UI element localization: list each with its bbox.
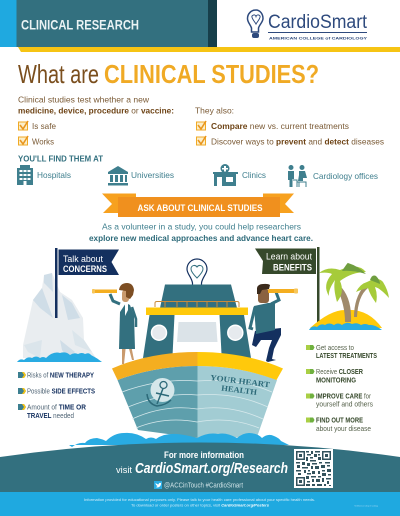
checklist: criteria: Is safe [32,121,56,131]
ribbon: ask about clinical studies [102,194,294,217]
island with palm trees [309,263,389,330]
icon: patient and doctor [288,165,307,187]
locations row: Hospitals [37,170,71,180]
locations heading: YOU'LL FIND THEM AT [18,154,104,164]
list: concerns [18,370,95,420]
volunteer statement: explore new medical approaches and advance heart care. [89,233,313,243]
checklist: they also: Discover ways to prevent and detect diseases [211,136,384,146]
intro text [18,94,174,116]
title: CLINICAL STUDIES? [104,59,319,89]
list: benefits: IMPROVE CARE for [316,392,371,400]
footer disclaimer: ©2016 American College of Cardiology [354,504,378,508]
footer band [0,442,400,493]
footer band: visit [116,465,132,476]
icon: hospital [17,165,33,185]
ship [112,284,283,438]
list: concerns: Amount of TIME OR [27,402,87,412]
anchor badge [147,378,174,406]
locations row: Cardiology offices [313,171,378,181]
flag: talk about concerns: CONCERNS [63,264,107,274]
flag: learn about benefits: BENEFITS [273,262,312,272]
locations row: Clinics [242,170,266,180]
man with spyglass [250,284,298,362]
locations row [17,164,378,187]
light bulb [187,259,207,290]
woman with spyglass [92,283,136,364]
footer disclaimer [0,492,400,516]
iceberg [23,273,96,358]
list: benefits: yourself and others [316,400,373,408]
list: benefits: FIND OUT MORE [316,416,363,424]
flag: learn about benefits [255,247,320,322]
waves under ship [69,433,289,447]
checklist: criteria [18,121,56,146]
CardioSmart logo: AMERICAN COLLEGE of CARDIOLOGY [269,36,367,40]
title [18,59,319,89]
QR code [294,449,333,488]
hull text: YOUR HEART [210,373,271,389]
list: benefits [306,343,377,433]
cabin [143,284,251,358]
checklist: criteria: Works [32,136,54,146]
locations row: Universities [131,170,174,180]
checklist: they also: Compare new vs. current treatments [211,121,349,131]
flag: talk about concerns: Talk about [63,254,103,264]
list: concerns: TRAVEL needed [27,411,74,420]
footer band: @ACCinTouch #CardioSmart [164,482,243,490]
icon: university [108,166,128,186]
list: concerns: Possible SIDE EFFECTS [27,386,95,396]
hull text [210,373,271,397]
header banner [0,0,400,52]
icon: clinic [213,164,238,186]
footer disclaimer: To download or order posters on other topics, visit CardioSmart.org/Posters [131,504,269,508]
water under iceberg [17,352,102,362]
list: benefits: MONITORING [316,376,356,384]
list: benefits: Get access to [316,343,354,352]
intro text: Clinical studies test whether a new [18,94,150,104]
list: benefits: LATEST TREATMENTS [316,351,377,360]
footer disclaimer: Information provided for educational purposes only. Please talk to your health care professional about your specific health needs. [84,498,315,502]
volunteer statement [89,222,313,243]
flag: learn about benefits: Learn about [266,252,312,262]
footer band: CardioSmart.org/Research [135,461,288,477]
ribbon: ask about clinical studies: ASK ABOUT CLINICAL STUDIES [138,203,262,214]
checklist: they also [195,106,384,146]
intro text: medicine, device, procedure or vaccine: [18,106,174,116]
title: What are [18,59,99,89]
hull [112,352,283,438]
more information text: For more information [164,450,244,460]
list: benefits: Receive CLOSER [316,367,363,376]
CardioSmart logo [248,10,368,40]
icon: twitter [154,481,162,489]
list: concerns: Risks of NEW THERAPY [27,370,94,380]
checklist: they also: They also: [195,106,234,116]
hull text: HEALTH [221,384,258,397]
volunteer statement: As a volunteer in a study, you could help researchers [102,222,301,232]
header label: CLINICAL RESEARCH [21,18,139,32]
list: benefits: about your disease [316,424,371,433]
flag: talk about concerns [55,248,119,318]
CardioSmart logo: CardioSmart [268,12,368,33]
